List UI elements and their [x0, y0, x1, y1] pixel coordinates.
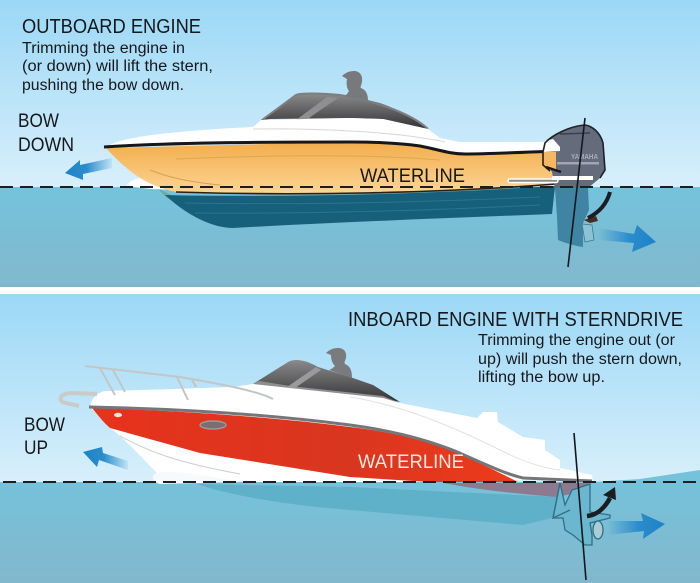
label: bow up: BOW — [24, 415, 65, 436]
trim line — [568, 118, 585, 267]
icon: sterndrive — [553, 483, 610, 545]
boat: sterndrive hull — [89, 348, 593, 497]
icon: outboard engine: YAMAHA — [571, 154, 598, 161]
sky — [0, 294, 700, 482]
panel: outboard engine, bow down — [0, 0, 700, 287]
text: outboard description: Trimming the engine in — [22, 40, 185, 57]
heading: outboard engine: OUTBOARD ENGINE — [22, 16, 201, 38]
label: bow down: DOWN — [18, 135, 74, 156]
text: outboard description: pushing the bow down. — [22, 77, 184, 94]
text: inboard description: lifting the bow up. — [478, 369, 605, 386]
water — [0, 187, 700, 287]
waterline — [0, 186, 700, 188]
text: inboard description — [478, 332, 682, 386]
hull reflection — [197, 484, 560, 525]
bow anchor — [61, 393, 97, 406]
text: inboard description: Trimming the engine out (or — [478, 332, 675, 349]
label: bow down: BOW — [18, 111, 59, 132]
text: outboard description — [22, 40, 213, 94]
boat: outboard hull — [104, 71, 558, 228]
arrow: engine trim out — [587, 487, 616, 516]
icon: outboard engine — [508, 125, 605, 247]
arrow: thrust right — [598, 225, 656, 252]
arrow: engine trim in — [588, 192, 610, 218]
label: bow up — [24, 415, 65, 459]
arrow: bow down — [65, 158, 112, 180]
panel: inboard engine with sterndrive, bow up — [0, 294, 700, 583]
arrow: thrust right — [607, 513, 665, 539]
label: waterline: WATERLINE — [358, 452, 464, 473]
text: inboard description: up) will push the stern down, — [478, 351, 682, 368]
trim line — [574, 433, 586, 580]
sky — [0, 0, 700, 187]
label: waterline: WATERLINE — [360, 166, 465, 187]
label: bow up: UP — [24, 438, 48, 459]
label: bow down — [18, 111, 74, 156]
waterline — [3, 481, 700, 483]
text: outboard description: (or down) will lift the stern, — [22, 58, 213, 75]
arrow: bow up — [83, 447, 128, 470]
water — [0, 470, 700, 583]
bow rail — [85, 366, 273, 400]
